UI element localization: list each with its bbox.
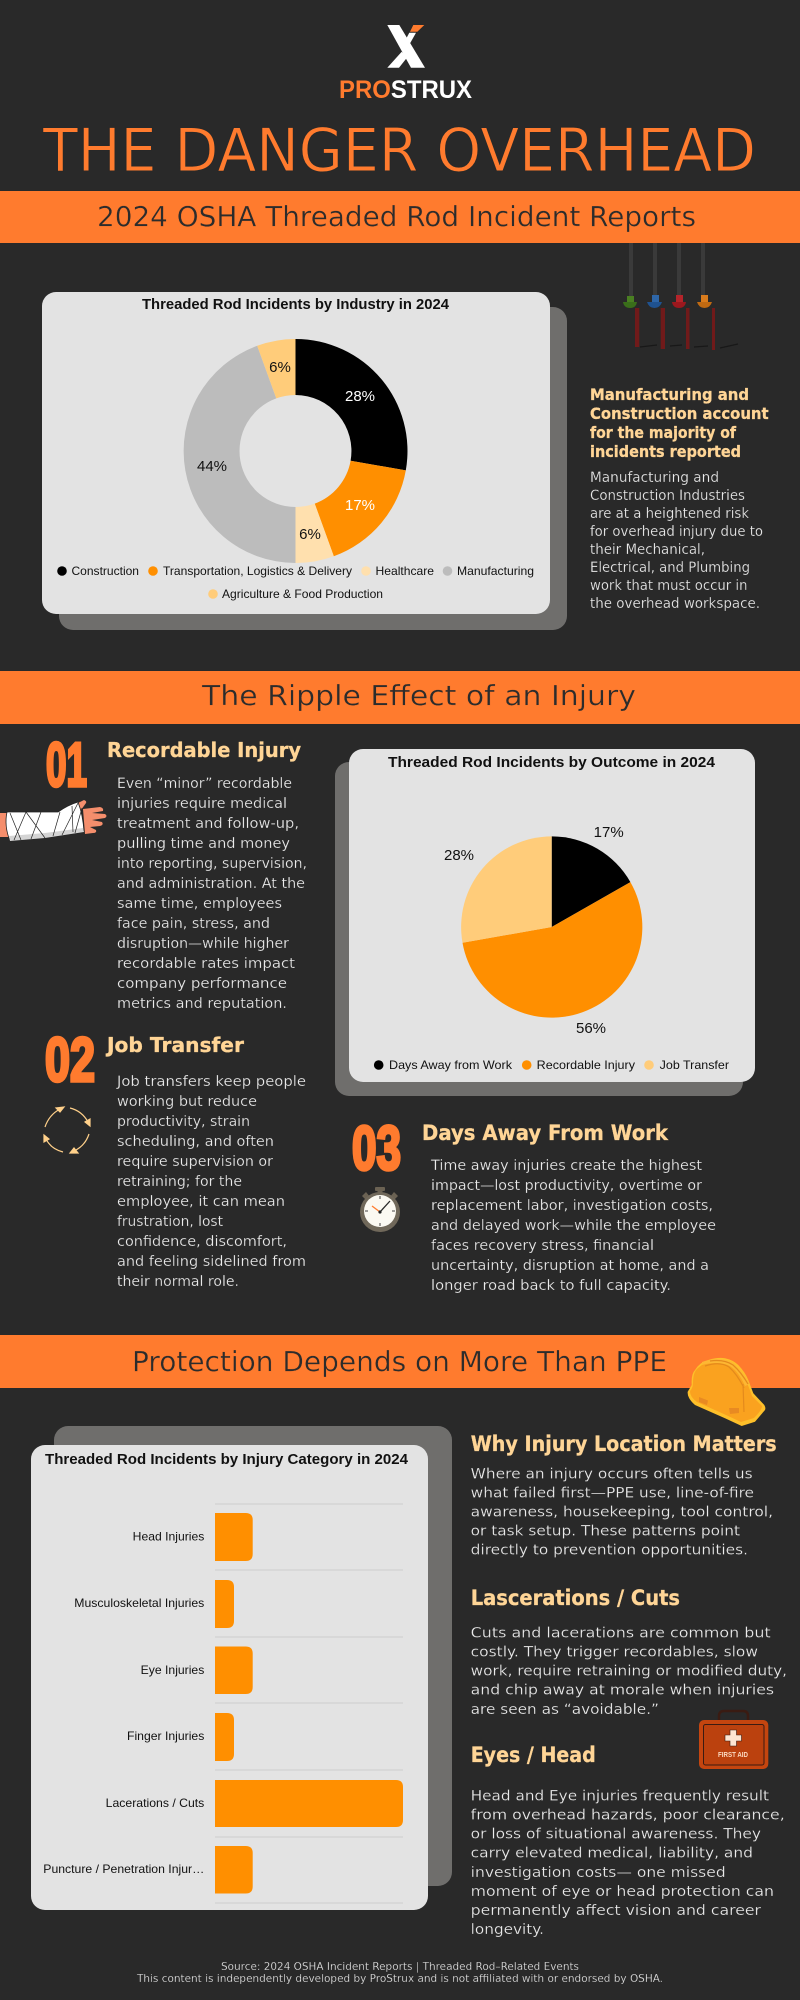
section banner: protection: Protection Depends on More Than PPE xyxy=(132,1346,667,1378)
icon: cycle arrows xyxy=(44,1107,90,1153)
logo: ProStrux: PROSTRUX xyxy=(339,76,472,104)
text block: lacerations: Cuts and lacerations are common but xyxy=(471,1625,771,1641)
text block: days away from work: and delayed work—while the employee xyxy=(431,1218,716,1234)
bar labels: Lacerations / Cuts xyxy=(106,1796,204,1810)
icon: first aid kit: FIRST AID xyxy=(718,1752,748,1759)
footer: source note: Source: 2024 OSHA Incident Reports | Threaded Rod–Related Events xyxy=(221,1961,579,1973)
section banner: ripple effect xyxy=(0,671,800,724)
text block: job transfer: retraining; for the xyxy=(117,1174,242,1190)
text block: job transfer xyxy=(116,1074,306,1290)
icon: bandaged arm xyxy=(0,800,106,841)
text block: industries at risk: Electrical, and Plumbing xyxy=(590,560,750,576)
bar labels: Finger Injuries xyxy=(127,1729,204,1743)
donut chart: 6% xyxy=(269,359,291,376)
text block: days away from work xyxy=(430,1158,716,1294)
text block: why injury location matters: directly to prevention opportunities. xyxy=(471,1543,748,1559)
pie chart: 17% xyxy=(594,824,624,841)
text block: industries at risk: work that must occur in xyxy=(590,578,748,594)
bars xyxy=(215,1513,403,1894)
icon: threaded rods xyxy=(623,243,738,350)
number 01: 01 xyxy=(46,731,87,800)
section banner: OSHA reports: 2024 OSHA Threaded Rod Incident Reports xyxy=(97,201,696,233)
text block: eyes and head: or loss of situational awareness. They xyxy=(471,1827,761,1843)
text block: eyes and head xyxy=(471,1788,785,1938)
footer: source note: This content is independently developed by ProStrux and is not affiliated with or endorsed by OSHA. xyxy=(136,1973,663,1985)
text block: days away from work: Time away injuries create the highest xyxy=(430,1158,703,1174)
panel: injury category bar chart: Threaded Rod Incidents by Injury Category in 2024 xyxy=(45,1452,408,1468)
text block: recordable injury: metrics and reputation. xyxy=(117,996,287,1012)
text block: days away from work: longer road back to full capacity. xyxy=(431,1278,671,1294)
text block: eyes and head: carry elevated medical, liability, and xyxy=(471,1846,753,1862)
text block: recordable injury: company performance xyxy=(117,976,287,992)
text block: recordable injury: Even “minor” recordable xyxy=(117,776,292,792)
legend: Manufacturing xyxy=(457,564,534,578)
legend: Recordable Injury xyxy=(537,1058,635,1072)
donut chart: 6% xyxy=(299,526,321,543)
text block: job transfer: their normal role. xyxy=(117,1274,239,1290)
text block: eyes and head: from overhead hazards, poor clearance, xyxy=(471,1808,785,1824)
callout heading: manufacturing and construction: Manufacturing and xyxy=(590,385,749,404)
text block: why injury location matters: what failed first—PPE use, line-of-fire xyxy=(471,1485,754,1501)
text block: why injury location matters: or task setup. These patterns point xyxy=(471,1524,741,1540)
text block: industries at risk: for overhead injury due to xyxy=(590,524,763,540)
text block: days away from work: uncertainty, disruption at home, and a xyxy=(431,1258,709,1274)
text block: job transfer: working but reduce xyxy=(117,1094,257,1110)
bar labels: Eye Injuries xyxy=(141,1663,204,1677)
bar labels: Head Injuries xyxy=(133,1530,204,1544)
text block: recordable injury: recordable rates impact xyxy=(117,956,296,972)
pie chart: 28% xyxy=(444,847,474,864)
section banner: ripple effect: The Ripple Effect of an Injury xyxy=(201,680,636,712)
text block: recordable injury: injuries require medical xyxy=(117,796,287,812)
panel: injury category bar chart xyxy=(31,1426,452,1910)
text block: job transfer: confidence, discomfort, xyxy=(117,1234,287,1250)
text block: eyes and head: Head and Eye injuries frequently result xyxy=(471,1788,770,1804)
text block: industries at risk: the overhead workspace. xyxy=(590,596,760,612)
text block: job transfer: employee, it can mean xyxy=(117,1194,285,1210)
text block: recordable injury: same time, employees xyxy=(117,896,282,912)
text block: recordable injury: and administration. At the xyxy=(117,876,305,892)
text block: why injury location matters xyxy=(471,1466,773,1559)
number 02: 02 xyxy=(45,1026,95,1095)
text block: job transfer: scheduling, and often xyxy=(117,1134,274,1150)
heading: recordable injury: Recordable Injury xyxy=(107,738,301,762)
section banner: protection xyxy=(0,1335,800,1388)
text block: why injury location matters: awareness, housekeeping, tool control, xyxy=(471,1504,773,1520)
text block: eyes and head: investigation costs— one missed xyxy=(471,1865,726,1881)
logo: ProStrux xyxy=(339,25,472,104)
legend xyxy=(57,564,534,601)
text block: lacerations: are seen as “avoidable.” xyxy=(471,1702,659,1718)
text block: industries at risk: are at a heightened risk xyxy=(590,506,750,522)
donut chart: 44% xyxy=(197,458,227,475)
heading: why injury location matters: Why Injury Location Matters xyxy=(471,1432,777,1456)
text block: recordable injury: disruption—while higher xyxy=(117,936,289,952)
legend: Job Transfer xyxy=(660,1058,729,1072)
text block: days away from work: replacement labor, investigation costs, xyxy=(431,1198,713,1214)
icon: hard hat xyxy=(688,1358,765,1426)
text block: lacerations: and chip away at morale when injuries xyxy=(471,1683,774,1699)
section banner: OSHA reports xyxy=(0,191,800,243)
icon: first aid kit xyxy=(699,1711,768,1769)
heading: days away from work: Days Away From Work xyxy=(422,1121,669,1145)
text block: eyes and head: permanently affect vision and career xyxy=(471,1903,761,1919)
heading: eyes / head: Eyes / Head xyxy=(471,1743,596,1767)
text block: lacerations: costly. They trigger recordables, slow xyxy=(471,1644,758,1660)
donut chart: 17% xyxy=(345,497,375,514)
legend: Transportation, Logistics & Delivery xyxy=(163,564,352,578)
text block: recordable injury: face pain, stress, and xyxy=(117,916,270,932)
title: THE DANGER OVERHEAD xyxy=(42,116,756,186)
text block: days away from work: impact—lost productivity, overtime or xyxy=(431,1178,702,1194)
bar labels xyxy=(43,1530,204,1876)
pie chart: 56% xyxy=(576,1020,606,1037)
text block: days away from work: faces recovery stress, financial xyxy=(431,1238,654,1254)
heading: job transfer: Job Transfer xyxy=(105,1033,244,1057)
callout heading: manufacturing and construction xyxy=(590,385,769,461)
panel: outcome pie chart: Threaded Rod Incidents by Outcome in 2024 xyxy=(388,755,715,771)
text block: why injury location matters: Where an injury occurs often tells us xyxy=(471,1466,753,1482)
text block: eyes and head: longevity. xyxy=(471,1922,544,1938)
text block: lacerations xyxy=(471,1625,787,1718)
callout heading: manufacturing and construction: Construction account xyxy=(590,404,769,423)
text block: job transfer: frustration, lost xyxy=(117,1214,223,1230)
legend xyxy=(374,1058,729,1072)
panel: industry donut chart: Threaded Rod Incidents by Industry in 2024 xyxy=(142,297,449,313)
panel: industry donut chart xyxy=(42,292,567,630)
icon: stopwatch xyxy=(360,1187,400,1232)
text block: industries at risk xyxy=(590,470,763,612)
text block: job transfer: and feeling sidelined from xyxy=(117,1254,306,1270)
text block: industries at risk: Construction Industries xyxy=(590,488,745,504)
text block: industries at risk: their Mechanical, xyxy=(590,542,705,558)
donut chart xyxy=(184,339,407,563)
text block: job transfer: Job transfers keep people xyxy=(116,1074,306,1090)
text block: job transfer: require supervision or xyxy=(117,1154,273,1170)
legend: Days Away from Work xyxy=(389,1058,513,1072)
text block: industries at risk: Manufacturing and xyxy=(590,470,719,486)
legend: Agriculture & Food Production xyxy=(222,587,383,601)
text block: recordable injury: pulling time and money xyxy=(117,836,290,852)
text block: recordable injury: treatment and follow-up, xyxy=(117,816,299,832)
bar labels: Musculoskeletal Injuries xyxy=(74,1596,204,1610)
text block: lacerations: work, require retraining or modified duty, xyxy=(471,1664,787,1680)
heading: lascerations / cuts: Lascerations / Cuts xyxy=(471,1586,680,1610)
pie chart xyxy=(444,824,642,1037)
legend: Healthcare xyxy=(376,564,434,578)
donut chart: 28% xyxy=(345,388,375,405)
text block: recordable injury xyxy=(117,776,307,1012)
callout heading: manufacturing and construction: for the majority of xyxy=(590,423,737,442)
footer: source note xyxy=(136,1961,663,1985)
text block: job transfer: productivity, strain xyxy=(117,1114,250,1130)
text block: recordable injury: into reporting, supervision, xyxy=(117,856,307,872)
bar labels: Puncture / Penetration Injur… xyxy=(43,1862,204,1876)
text block: eyes and head: moment of eye or head protection can xyxy=(471,1884,774,1900)
callout heading: manufacturing and construction: incidents reported xyxy=(590,442,741,461)
panel: outcome pie chart xyxy=(335,749,755,1096)
number 03: 03 xyxy=(352,1115,401,1184)
legend: Construction xyxy=(72,564,139,578)
